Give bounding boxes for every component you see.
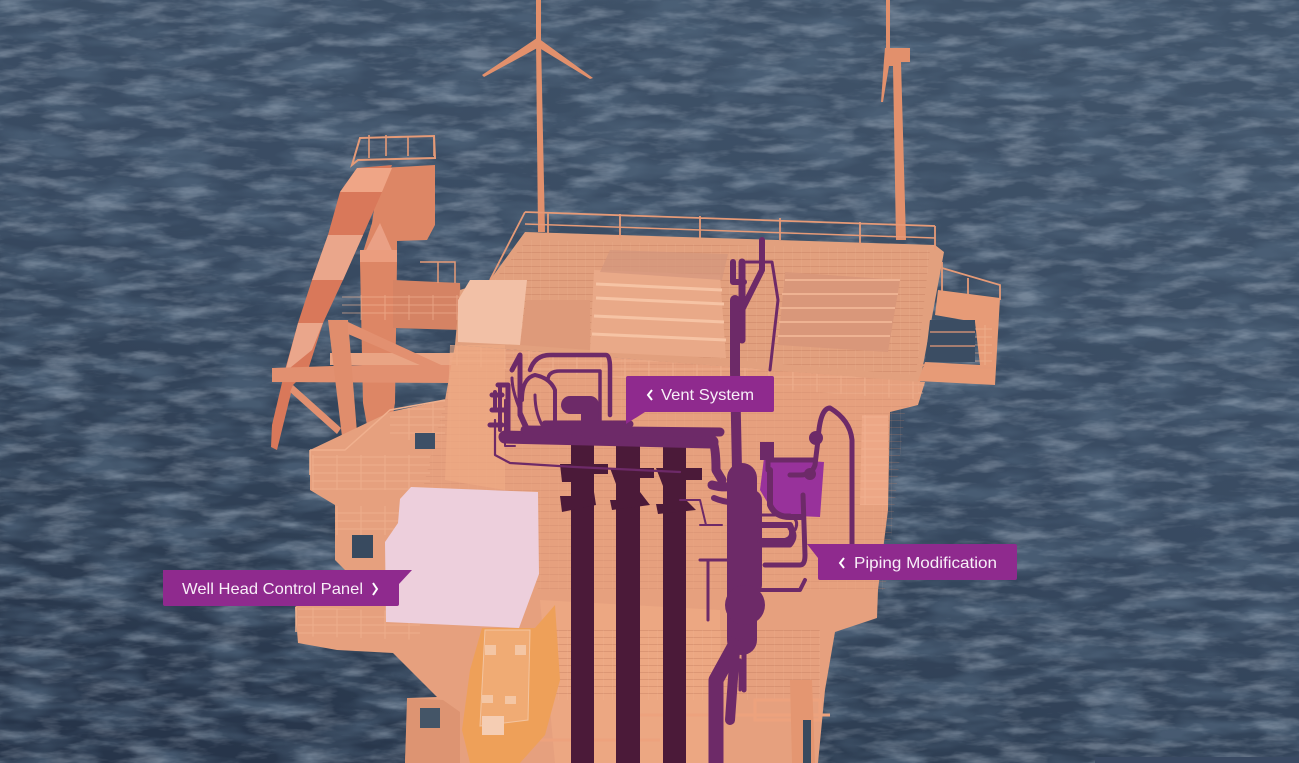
well head control panel highlight <box>385 487 539 628</box>
icon: left chevron <box>840 558 844 568</box>
riser pipes <box>560 445 702 763</box>
icon: right chevron <box>373 583 377 595</box>
label: Piping Modification: Piping Modification <box>854 555 997 572</box>
left-side bright structure <box>445 345 720 763</box>
vent system pipework <box>490 355 745 525</box>
crane support frame <box>272 320 455 470</box>
lower platform section <box>405 630 830 763</box>
piping modification highlight <box>760 458 824 517</box>
icon: wind turbine mast <box>482 0 593 232</box>
label: Vent System <box>626 376 774 424</box>
label: Piping Modification <box>807 544 1017 580</box>
right walkway <box>918 262 1000 385</box>
vertical vent stack <box>700 240 852 763</box>
crane pedestal and boom <box>271 135 462 453</box>
label: Well Head Control Panel <box>163 570 412 606</box>
label: Vent System: Vent System <box>661 387 754 404</box>
text: panel name: Well Head Control Panel <box>182 581 363 598</box>
light equipment block <box>458 280 527 345</box>
icon: antenna mast <box>881 0 910 240</box>
lifeboat <box>462 605 560 763</box>
platform main body <box>295 345 925 763</box>
top deck <box>455 212 944 382</box>
icon: left chevron <box>648 390 652 400</box>
